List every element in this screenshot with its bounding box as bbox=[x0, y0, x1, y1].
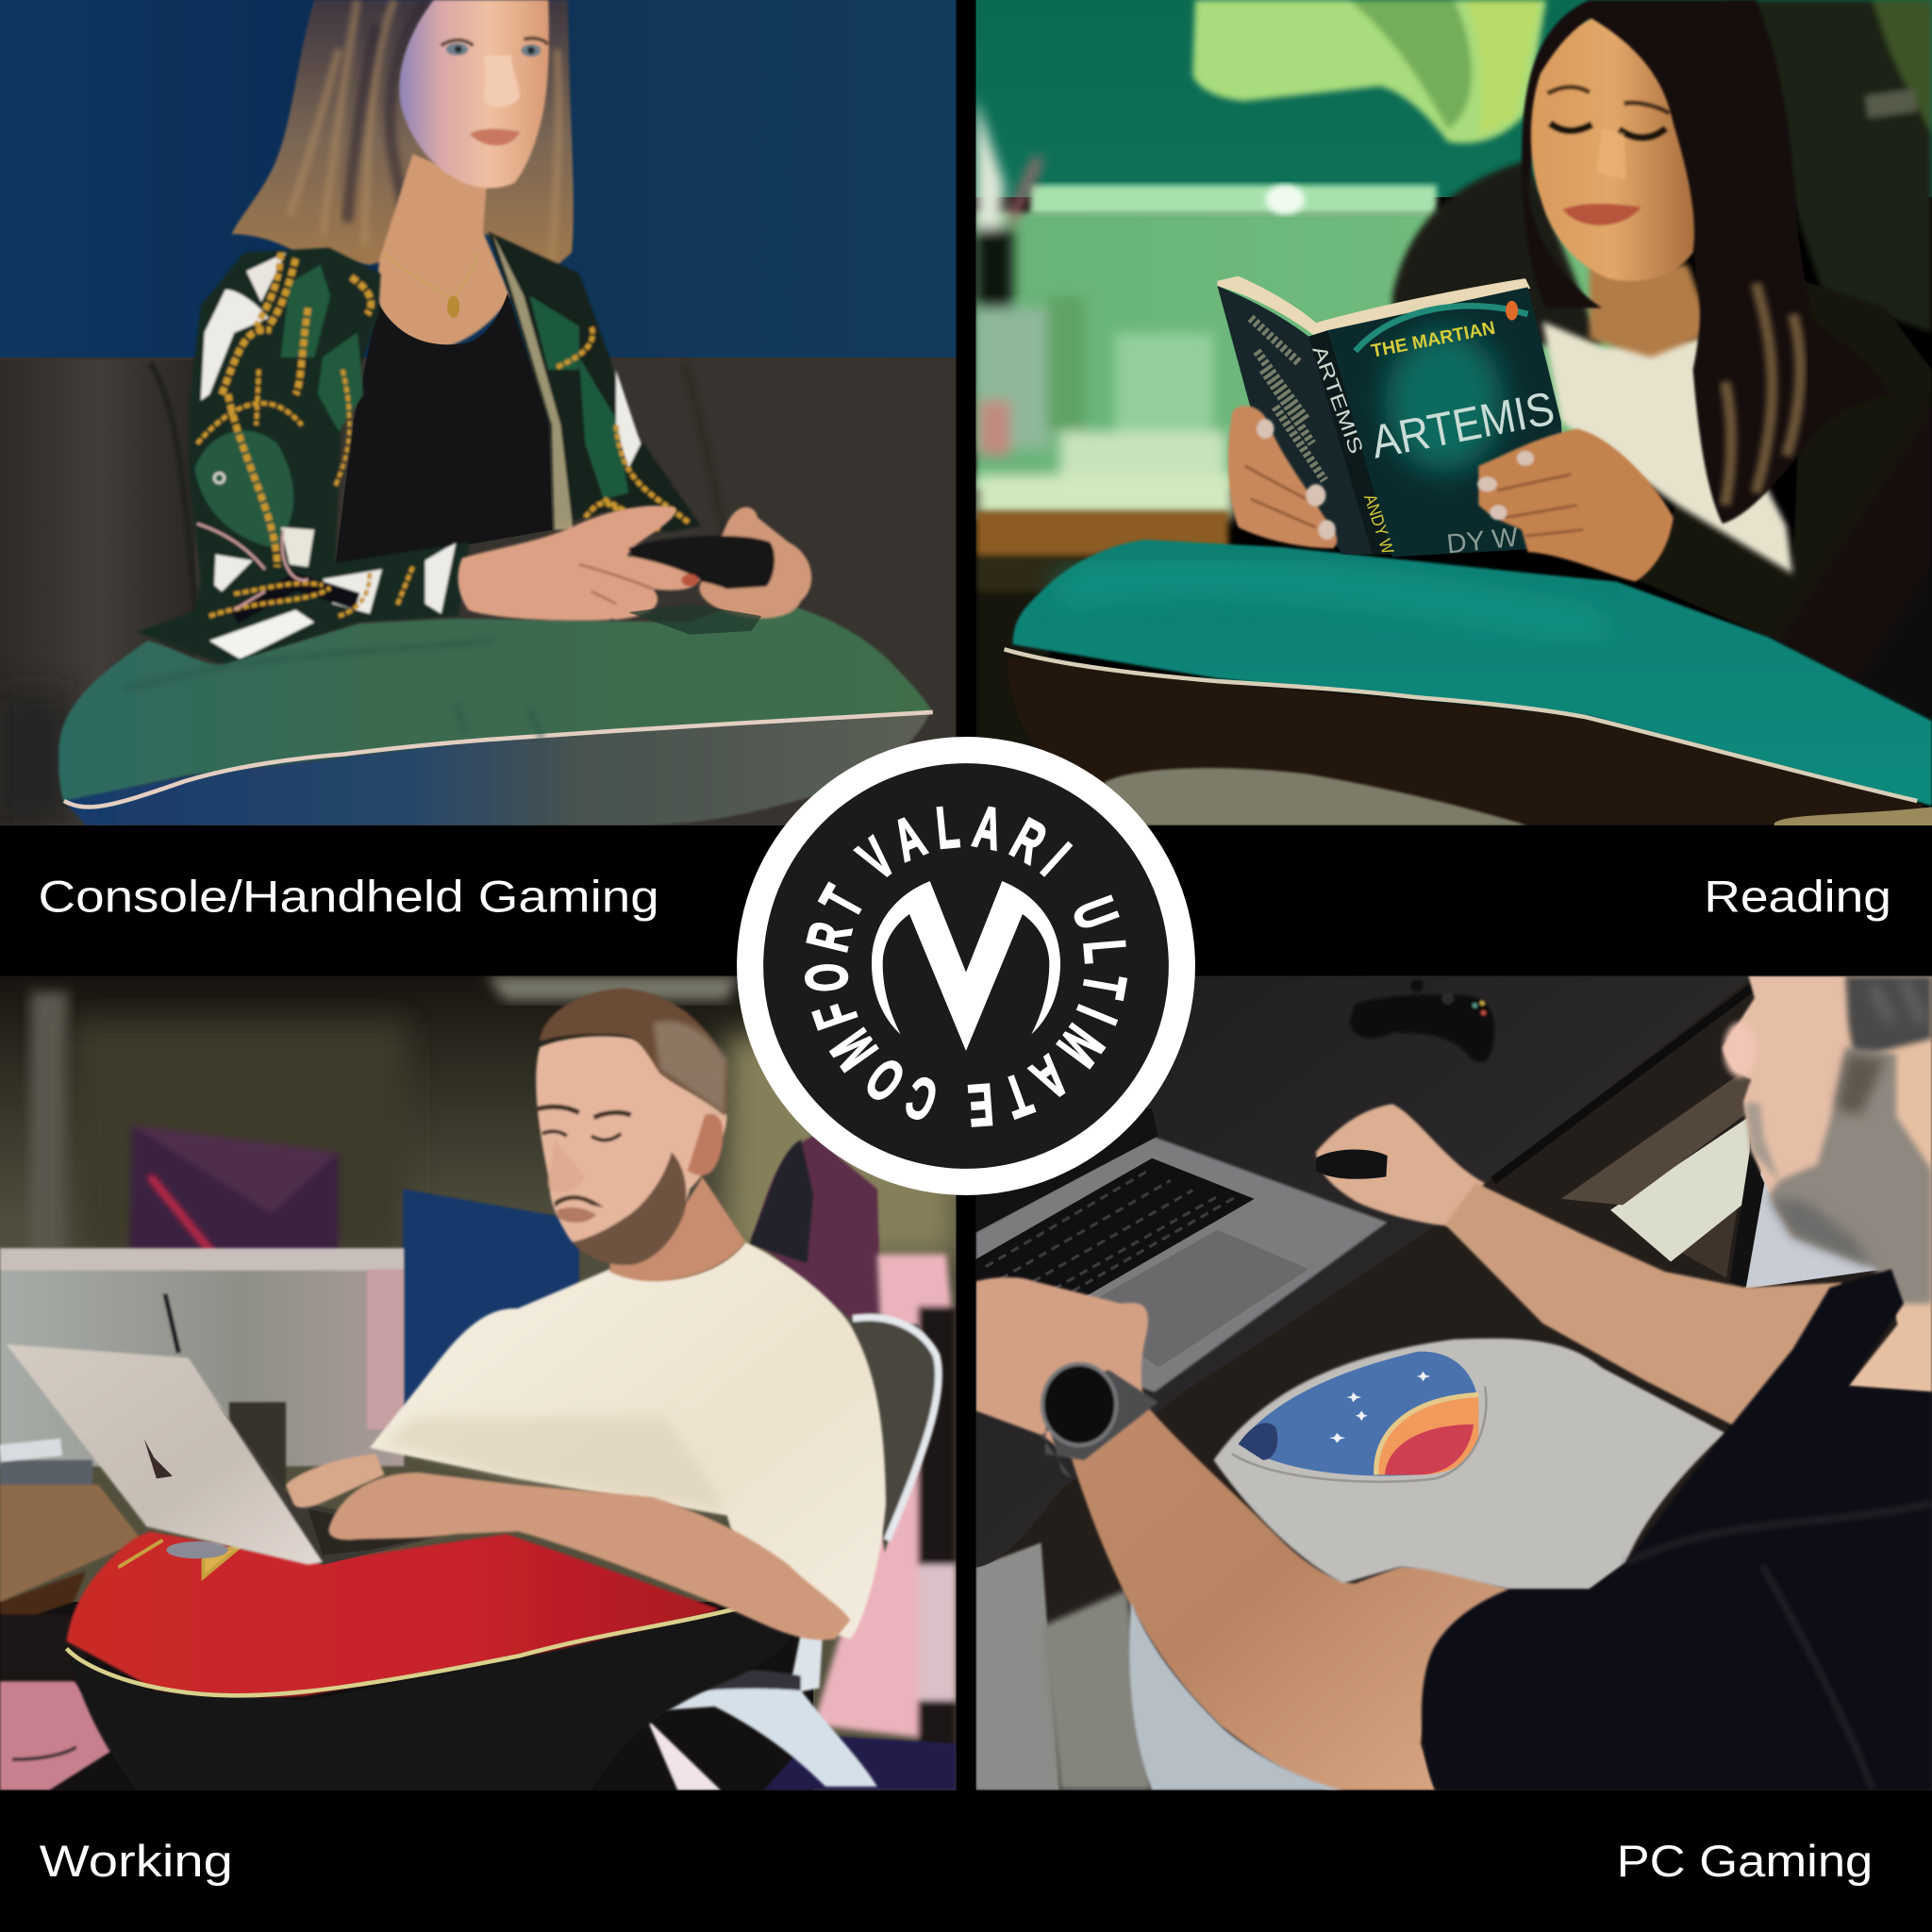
man: office chair back and frame bbox=[591, 1316, 939, 1790]
badge word: VALARI: VALARI bbox=[853, 806, 1074, 877]
cover strapline: THE MARTIAN bbox=[1370, 318, 1497, 362]
cushion yellow piping bbox=[67, 1607, 740, 1695]
print: red planet bbox=[1385, 1424, 1474, 1474]
print: blue sky bbox=[1239, 1352, 1478, 1475]
grey trousers bbox=[1104, 768, 1528, 825]
smartwatch bbox=[1041, 1364, 1158, 1478]
red cushion bbox=[67, 1532, 720, 1698]
grey beard bbox=[1770, 1047, 1932, 1304]
cushion corner stitching bbox=[628, 604, 761, 635]
man: neck bbox=[610, 1176, 745, 1281]
patterned shirt: right placket and sleeve bbox=[488, 232, 701, 532]
man: short hair bbox=[540, 989, 728, 1115]
label: PC gaming: PC Gaming bbox=[1617, 1836, 1873, 1886]
hair dark streaks near face bbox=[347, 0, 425, 246]
book front cover bbox=[1328, 287, 1567, 557]
cushion highlight bbox=[1059, 576, 1602, 628]
hair bbox=[1846, 975, 1932, 1059]
cushion black base bbox=[72, 1609, 793, 1790]
dark lower background bbox=[0, 1602, 813, 1790]
hair highlights bbox=[1725, 283, 1800, 506]
print outline bbox=[1232, 1386, 1486, 1482]
man: white t-shirt bbox=[370, 1242, 886, 1639]
cushion: grey-blue underside bbox=[64, 712, 930, 825]
woman: hair bbox=[232, 0, 574, 278]
cover author: DY W bbox=[1445, 523, 1521, 559]
neck bbox=[1590, 258, 1713, 358]
black desk top bbox=[975, 975, 1755, 1567]
chair dark side bbox=[749, 1140, 813, 1263]
print: stars bbox=[1329, 1372, 1430, 1442]
wireless mouse bbox=[1316, 1149, 1388, 1179]
panel: PC gaming photo bbox=[975, 975, 1932, 1790]
pale green lower wall bbox=[975, 212, 1646, 490]
cushion: green top bbox=[58, 597, 933, 804]
teal cushion top bbox=[1013, 540, 1932, 806]
spine title: ARTEMIS bbox=[1307, 342, 1367, 457]
back cover copy bbox=[1251, 318, 1324, 480]
badge word: ULTIMATE: ULTIMATE bbox=[968, 894, 1128, 1127]
laptop keyboard highlights bbox=[308, 1509, 443, 1555]
shirt folds bbox=[1626, 1503, 1932, 1790]
blue divider panel bbox=[403, 1189, 579, 1417]
forearm and hand typing bbox=[328, 1473, 850, 1640]
badge M emblem bbox=[872, 881, 1060, 1051]
laptop base and keyboard bbox=[185, 1361, 451, 1565]
paperback book: Artemis bbox=[1217, 276, 1567, 559]
purple floor bbox=[764, 1735, 957, 1790]
neck and ear-side skin bbox=[1811, 975, 1932, 1392]
beige surface corner bbox=[1774, 808, 1932, 825]
grey partition bbox=[0, 1248, 404, 1466]
long dark hair bbox=[1522, 0, 1890, 524]
panel: reading photo bbox=[975, 0, 1932, 825]
man: face bbox=[536, 1036, 727, 1265]
print: dark nebula bbox=[1239, 1423, 1277, 1460]
pale wall bbox=[1744, 1164, 1885, 1289]
panel: working photo bbox=[0, 975, 957, 1790]
grey-green seat bbox=[1041, 1590, 1152, 1790]
white drawer front bbox=[1610, 1116, 1750, 1261]
game controller on desk bbox=[1349, 979, 1494, 1062]
print: planet rim bbox=[1376, 1395, 1478, 1474]
black post bbox=[1730, 1152, 1764, 1288]
man: head, neck, hair and beard bbox=[1723, 975, 1932, 1392]
grey cushion with planet print bbox=[1214, 1339, 1725, 1590]
magenta monitor bbox=[129, 1124, 339, 1259]
badge white ring bbox=[737, 737, 1195, 1195]
desk items and wood top bbox=[0, 1402, 286, 1790]
spine author: ANDY W bbox=[1360, 491, 1398, 557]
black t-shirt bbox=[1422, 1269, 1932, 1790]
laptop chassis bbox=[975, 1136, 1388, 1392]
book spine bbox=[1308, 330, 1392, 555]
hair fade bbox=[653, 1021, 727, 1115]
wooden desk bbox=[975, 511, 1228, 825]
lime wall mural bbox=[1192, 0, 1546, 143]
teal wall bbox=[975, 0, 1932, 197]
woman: necklace bbox=[385, 253, 478, 299]
hands and controller bbox=[458, 506, 811, 621]
blurred office background bbox=[0, 975, 957, 1790]
woman: neck and chest bbox=[375, 154, 510, 350]
badge word: COMFORT: COMFORT bbox=[805, 881, 936, 1120]
apple logo bbox=[144, 1440, 173, 1478]
blurred desk objects bbox=[975, 98, 1235, 518]
glowing ledge strip bbox=[1030, 185, 1437, 214]
beard dark upper tuft bbox=[1836, 1054, 1885, 1115]
laptop display hinge bbox=[975, 1096, 1158, 1232]
left hand on trackpad bbox=[975, 1277, 1148, 1460]
label: console/handheld gaming: Console/Handheld Gaming bbox=[38, 872, 659, 922]
left forearm and upper arm bbox=[1072, 1405, 1509, 1790]
beard lower silver bbox=[1770, 1198, 1874, 1268]
gaming chair bbox=[1392, 0, 1932, 345]
hands holding book bbox=[1228, 406, 1674, 581]
wooden drawer top bbox=[1561, 1067, 1750, 1205]
navy wall bbox=[0, 0, 957, 359]
cream piping bbox=[1004, 649, 1917, 801]
book back cover bbox=[1217, 286, 1390, 555]
woman: smiling face bbox=[1531, 19, 1694, 281]
cover title: ARTEMIS bbox=[1367, 381, 1558, 469]
cover face glow bbox=[1385, 329, 1503, 472]
panel: console / handheld gaming photo bbox=[0, 0, 957, 825]
ledge highlight bbox=[1265, 185, 1305, 214]
trackpad bbox=[1079, 1230, 1308, 1368]
label: working: Working bbox=[40, 1836, 233, 1886]
dark leather sofa bbox=[0, 358, 957, 825]
grey-blue lower cushion bbox=[1129, 1602, 1343, 1790]
hair grey strands bbox=[1873, 979, 1923, 1023]
print: orange planet ring bbox=[1376, 1395, 1478, 1474]
right arm bbox=[1445, 1183, 1842, 1428]
chin stubble bbox=[1744, 1103, 1779, 1180]
hair strands bbox=[290, 0, 559, 258]
cushion: cream piping bbox=[64, 712, 933, 807]
face profile bbox=[1723, 975, 1848, 1236]
patterned shirt: left side and sleeve bbox=[137, 248, 470, 665]
nose highlight bbox=[1724, 1023, 1756, 1077]
grey floor strip bbox=[975, 1542, 1059, 1790]
cushion dark brown base bbox=[1008, 657, 1932, 825]
under-desk dark area bbox=[975, 975, 1932, 1790]
cushion emblem bbox=[118, 1541, 241, 1577]
white t-shirt bbox=[1542, 322, 1792, 575]
book page edges bbox=[1217, 276, 1530, 339]
lower brown drawer bbox=[1623, 1199, 1739, 1277]
silver laptop lid bbox=[7, 1344, 323, 1565]
pendant bbox=[447, 295, 459, 318]
t-shirt shadow bbox=[382, 1417, 727, 1509]
label: reading: Reading bbox=[1704, 872, 1891, 922]
pink office block bbox=[813, 1255, 957, 1750]
desk front edge bbox=[1493, 986, 1755, 1180]
penguin logo bbox=[1506, 301, 1518, 321]
keyboard bbox=[975, 1158, 1255, 1312]
cover arc bbox=[1356, 306, 1528, 351]
woman: face bbox=[399, 0, 549, 188]
furniture behind man bbox=[1561, 1067, 1885, 1289]
right hand on mouse bbox=[1316, 1104, 1485, 1226]
logo badge: Valari Ultimate Comfort bbox=[737, 737, 1195, 1195]
black ribbed tank top bbox=[335, 293, 552, 567]
other hand bbox=[286, 1454, 385, 1507]
badge dark disc bbox=[763, 763, 1169, 1169]
dark cardigan bbox=[1635, 271, 1932, 721]
cushion folds bbox=[124, 641, 542, 740]
pink gaming chair bbox=[752, 1136, 881, 1319]
